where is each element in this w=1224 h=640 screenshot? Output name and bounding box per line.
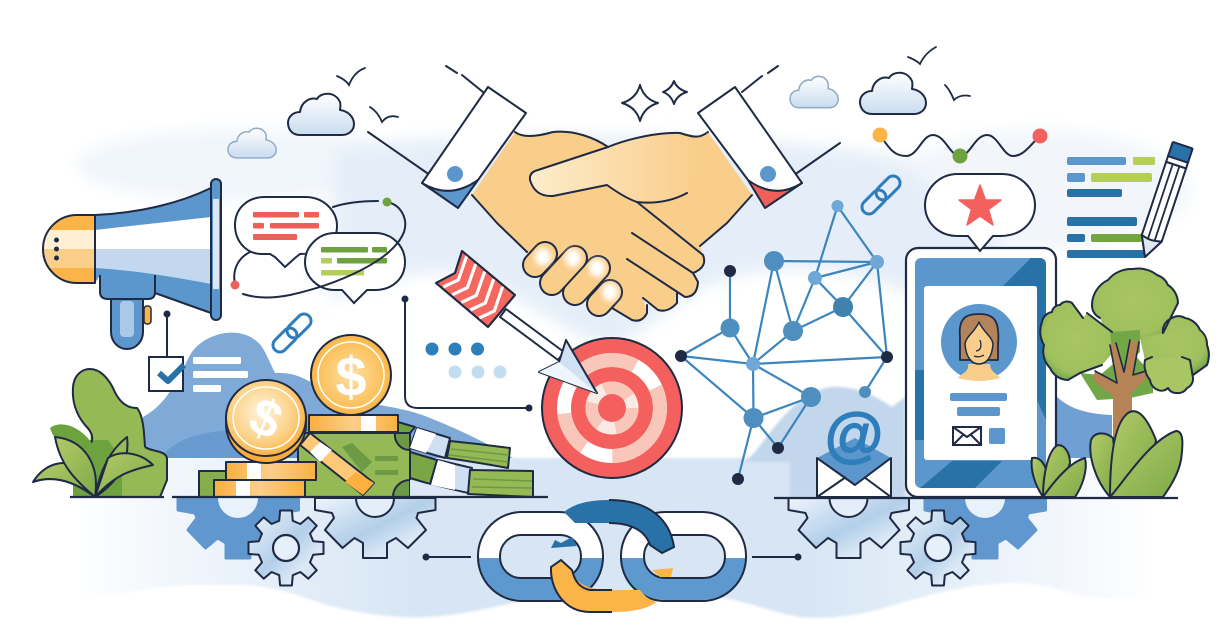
hill: left blue with list [143,333,513,458]
pin line left [422,554,471,560]
sparkles [622,81,687,121]
dots and L-shaped connector [402,296,532,412]
lower foliage [1080,350,1153,400]
crown outlines [1040,269,1209,393]
chain [422,500,802,612]
base line right [774,497,1178,499]
handshake [472,132,752,321]
icon: mail [953,427,981,445]
gear: small right [900,510,976,586]
plant: right large [1090,411,1182,497]
gear: half gear left [315,498,436,558]
link: center bottom orange [551,560,657,612]
target [542,338,682,478]
hands: fill silhouette [472,132,752,321]
coin: front left [226,380,306,463]
right cuff and sleeve [698,66,840,208]
connector curve [234,201,405,298]
crown: right [1140,316,1209,375]
speech bubbles with connector [230,197,405,303]
smartphone profile [906,248,1056,497]
background: pale blue wash [70,129,1190,618]
clouds [228,73,926,158]
finger one [535,248,551,266]
icon: pencil [1136,142,1193,260]
wave with colored dots [872,128,1048,164]
crown: lower lobe [1145,357,1193,393]
arrow with fletching [436,251,597,393]
hill: right blue behind phone [745,387,1112,497]
link: center top blue [564,500,674,553]
coin: front left: $ [241,387,290,451]
crown: left [1040,302,1115,380]
base line left [172,496,548,498]
envelope with at sign [817,401,891,497]
text lines right [1067,157,1155,258]
finger two [552,249,581,283]
bubble: red message [235,197,337,267]
avatar [941,304,1017,381]
thumb [530,133,700,203]
link: left [478,512,603,601]
money pile [199,422,533,497]
gear: small left [248,510,324,586]
network graph [675,200,893,485]
pin line right [752,554,802,560]
bubble: green message [305,233,405,303]
trunk outlines [1095,340,1146,383]
tree [1040,269,1209,438]
thumb outline [530,147,687,203]
finger four [599,283,618,304]
gear: dark blue right [925,498,1046,558]
crown: top [1092,269,1178,342]
envelope with at sign: @ [825,401,883,468]
coin stacks [214,415,398,497]
plant: right small [1032,445,1086,497]
checkbox with pin [149,310,184,391]
hands: outlines [472,132,752,321]
link: right [621,512,746,601]
screen dark stripes [915,258,1046,488]
gear: half gear right [788,498,909,558]
megaphone [40,179,221,349]
icon: chain link left [270,311,314,355]
left cuff and sleeve [368,66,526,208]
coin: upright right [311,335,391,415]
star speech bubble [925,174,1035,251]
coin: upright right: $ [335,345,367,408]
finger three [575,259,605,293]
icon: chain link right [859,173,903,217]
trunk [1093,340,1147,438]
birds [337,47,970,122]
plant: left bush [33,369,167,497]
gear: dark blue left [178,498,298,558]
center foliage [1110,330,1140,365]
